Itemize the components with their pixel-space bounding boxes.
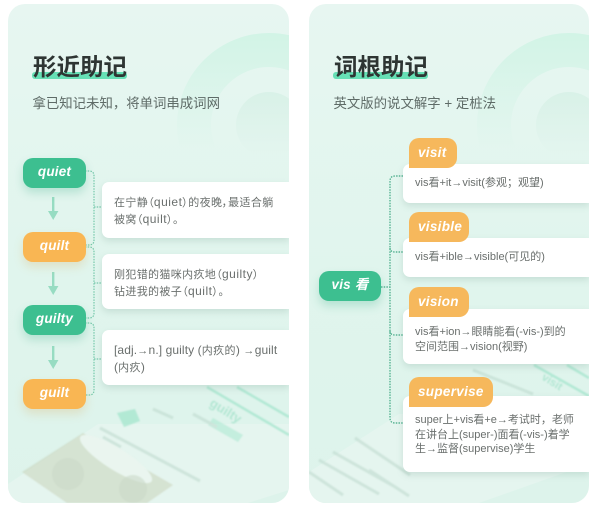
panel: word root mnemonic: [309, 4, 589, 503]
tag: supervise: [409, 377, 493, 407]
word pill: quiet: [23, 158, 86, 188]
word pill: guilty: [23, 305, 86, 335]
word pill: quilt: [23, 232, 86, 262]
word pill: guilty: guilty: [36, 311, 73, 326]
tag: visit: [409, 138, 457, 168]
subtitle: 英文版的说文解字 + 定桩法: [334, 96, 496, 111]
card: visible: vis看+ible→visible(可见的): [415, 251, 545, 263]
card: vision: 空间范围→vision(视野): [415, 340, 527, 352]
panel: shape-similar mnemonic: [8, 4, 289, 503]
background decoration: rings and faded app screen: [22, 33, 289, 503]
tag: visit: visit: [418, 145, 447, 160]
card: supervise: 在讲台上(super-)面看(-vis-)着学: [415, 428, 570, 440]
word pill: quilt: quilt: [40, 238, 69, 253]
card: visible: [401, 212, 589, 282]
card: supervise: 生→监督(supervise)学生: [415, 443, 535, 455]
root pill: vis 看: [319, 271, 381, 301]
card: guilty to guilt: [102, 330, 289, 385]
title: 词根助记: [334, 54, 428, 80]
tag: visible: visible: [418, 219, 462, 234]
card: vision: [402, 287, 589, 368]
background decoration: rings and faded app screen: visit: [539, 371, 565, 393]
card: quiet to quilt: 在宁静（quiet）的夜晚，最适合躺: [114, 195, 274, 209]
card: guilty to guilt: [adj.→n.] guilty (内疚的) →guilt: [114, 343, 277, 357]
card: supervise: super上+vis看+e→考试时，老师: [415, 414, 574, 426]
card: guilty to guilt: (内疚): [114, 360, 145, 374]
tag: vision: [409, 287, 469, 317]
tag: vision: vision: [418, 294, 459, 309]
background decoration: rings and faded app screen: [309, 33, 589, 496]
card: vision: vis看+ion→眼睛能看(-vis-)到的: [415, 326, 566, 338]
word pill: guilt: [23, 379, 86, 409]
card: guilty to quilt: [102, 254, 289, 309]
card: guilty to quilt: 钻进我的被子（quilt）。: [114, 284, 224, 298]
background decoration: rings and faded app screen: guilty: [207, 395, 245, 427]
card: supervise: [401, 377, 589, 477]
word pill: guilt: guilt: [40, 385, 69, 400]
connector: dotted tree from root to cards: [381, 175, 403, 424]
word pill: quiet: quiet: [38, 164, 71, 179]
card: quiet to quilt: 被窝（quilt）。: [114, 212, 179, 226]
tag: visible: [409, 212, 469, 242]
card: visit: [401, 138, 589, 208]
root pill: vis 看: vis 看: [331, 277, 369, 292]
tag: supervise: supervise: [418, 384, 484, 399]
title: 形近助记: [33, 54, 127, 80]
card: guilty to quilt: 刚犯错的猫咪内疚地（guilty）: [114, 267, 259, 281]
subtitle: 拿已知记未知，将单词串成词网: [32, 96, 220, 111]
connectors: dotted brackets and down arrows: [48, 170, 101, 396]
card: visit: vis看+it→visit(参观；观望): [415, 177, 544, 189]
card: quiet to quilt: [102, 182, 289, 238]
